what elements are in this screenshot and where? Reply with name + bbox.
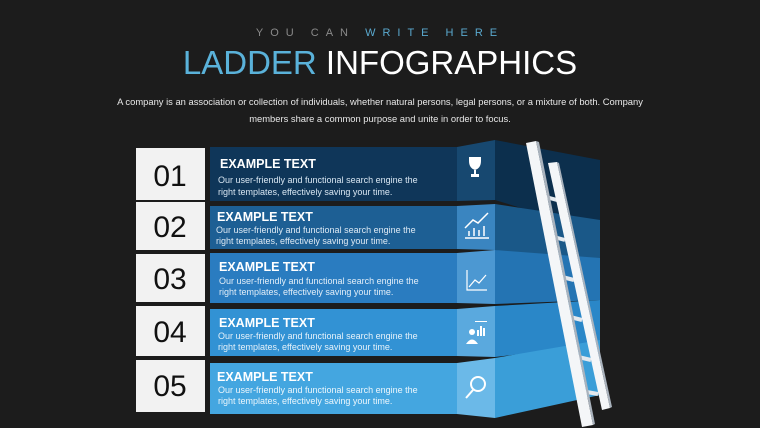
description — [117, 96, 643, 124]
icon: line chart — [467, 270, 487, 290]
description: A company is an association or collection of individuals, whether natural persons, legal persons, or a mixture of both. Company — [117, 96, 643, 107]
description: members share a common purpose and unite in order to focus. — [249, 113, 511, 124]
step 2: EXAMPLE TEXT — [217, 210, 313, 224]
step 4 — [136, 306, 495, 357]
ladder — [526, 141, 612, 427]
step 2: 02 — [153, 211, 187, 244]
step 2 — [136, 202, 495, 250]
step 1: 01 — [153, 160, 187, 193]
step 5: EXAMPLE TEXT — [217, 370, 313, 384]
step 4: EXAMPLE TEXT — [219, 316, 315, 330]
step 2: right templates, effectively saving your time. — [216, 236, 390, 246]
step 5: 05 — [153, 370, 187, 403]
subtitle: YOU CAN WRITE HERE — [256, 27, 504, 39]
title: LADDER INFOGRAPHICS — [183, 44, 577, 81]
step 5: right templates, effectively saving your time. — [218, 396, 392, 406]
icon: presenter — [466, 321, 487, 344]
step 1: right templates, effectively saving your time. — [218, 187, 392, 197]
side faces — [495, 140, 600, 418]
step 2: Our user-friendly and functional search engine the — [216, 225, 416, 235]
step 1: EXAMPLE TEXT — [220, 157, 316, 171]
step 1 — [136, 140, 495, 201]
step 3: right templates, effectively saving your time. — [219, 287, 393, 297]
icon: growth chart — [465, 213, 489, 238]
step 4: 04 — [153, 316, 187, 349]
icon: trophy — [469, 157, 481, 177]
step 1: Our user-friendly and functional search engine the — [218, 175, 418, 185]
step 3: EXAMPLE TEXT — [219, 260, 315, 274]
step 3: Our user-friendly and functional search engine the — [219, 276, 419, 286]
step 4: Our user-friendly and functional search engine the — [218, 331, 418, 341]
step 5: Our user-friendly and functional search engine the — [218, 385, 418, 395]
icon: magnifier — [466, 377, 485, 398]
step 3: 03 — [153, 263, 187, 296]
step 3 — [136, 250, 495, 304]
step 4: right templates, effectively saving your time. — [218, 342, 392, 352]
step 5 — [136, 358, 495, 418]
